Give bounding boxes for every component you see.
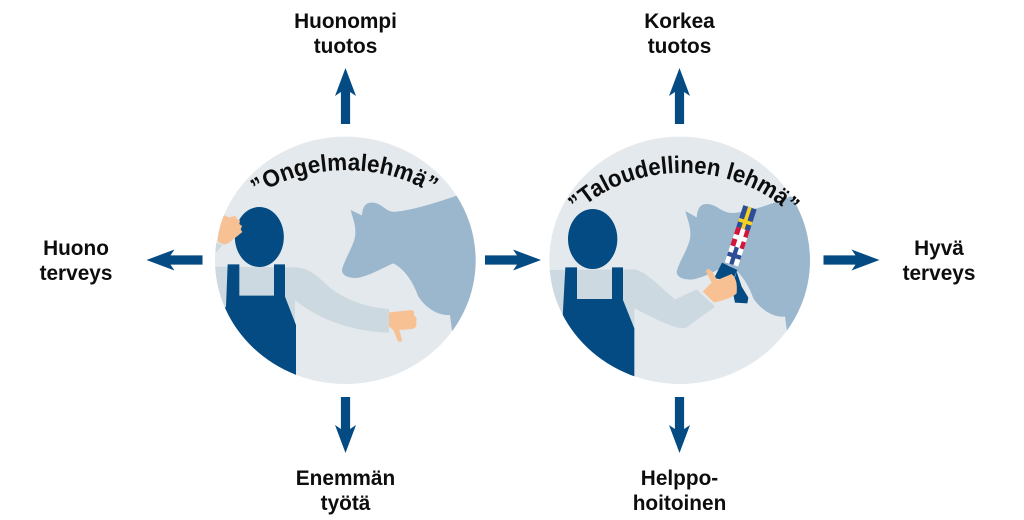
label: Korkea tuotos: Korkea <box>644 10 715 33</box>
label: Hyvä terveys: Hyvä <box>914 237 964 260</box>
cow <box>342 196 490 331</box>
label: Enemmän työtä: työtä <box>321 492 371 515</box>
curved title: ”Taloudellinen lehmä” <box>568 156 800 207</box>
arrow: up left <box>335 68 356 124</box>
head <box>568 209 617 269</box>
label: Huonompi tuotos: Huonompi <box>294 10 397 33</box>
shirt and arm <box>210 267 389 333</box>
arrow: down left <box>335 397 356 453</box>
label: Korkea tuotos: tuotos <box>648 35 711 58</box>
arrow: down right <box>669 397 690 453</box>
other arm <box>215 243 222 252</box>
label: Helppohoitoinen: hoitoinen <box>633 492 726 515</box>
hand on head <box>218 215 242 244</box>
hand holding scarf <box>703 269 737 302</box>
scarf wrap <box>714 263 737 281</box>
overalls <box>224 264 296 375</box>
label: Hyvä terveys: terveys <box>903 262 975 285</box>
panel: Taloudellinen lehmä circle <box>549 136 810 384</box>
panel: Ongelmalehmä circle <box>215 136 476 384</box>
label: Huonompi tuotos: tuotos <box>314 35 377 58</box>
label: Enemmän työtä: Enemmän <box>296 467 395 490</box>
scarf <box>714 205 757 303</box>
label: Helppohoitoinen: Helppo- <box>641 467 718 490</box>
label: Huono terveys: terveys <box>40 262 112 285</box>
arrow: middle <box>485 250 541 270</box>
cow <box>676 196 810 331</box>
circle background <box>215 137 476 384</box>
label: Huono terveys: Huono <box>43 237 109 260</box>
circle background <box>549 137 810 384</box>
arrow: up right <box>669 68 690 124</box>
overalls <box>562 267 634 376</box>
flag stripes <box>725 205 757 267</box>
shirt and arm <box>548 269 715 337</box>
thumbs-down hand <box>389 310 417 342</box>
scarf fringe <box>732 272 748 303</box>
curved title: ”Ongelmalehmä” <box>250 154 439 188</box>
arrow: right <box>824 250 880 270</box>
arrow: left <box>146 250 202 270</box>
head <box>235 207 284 267</box>
